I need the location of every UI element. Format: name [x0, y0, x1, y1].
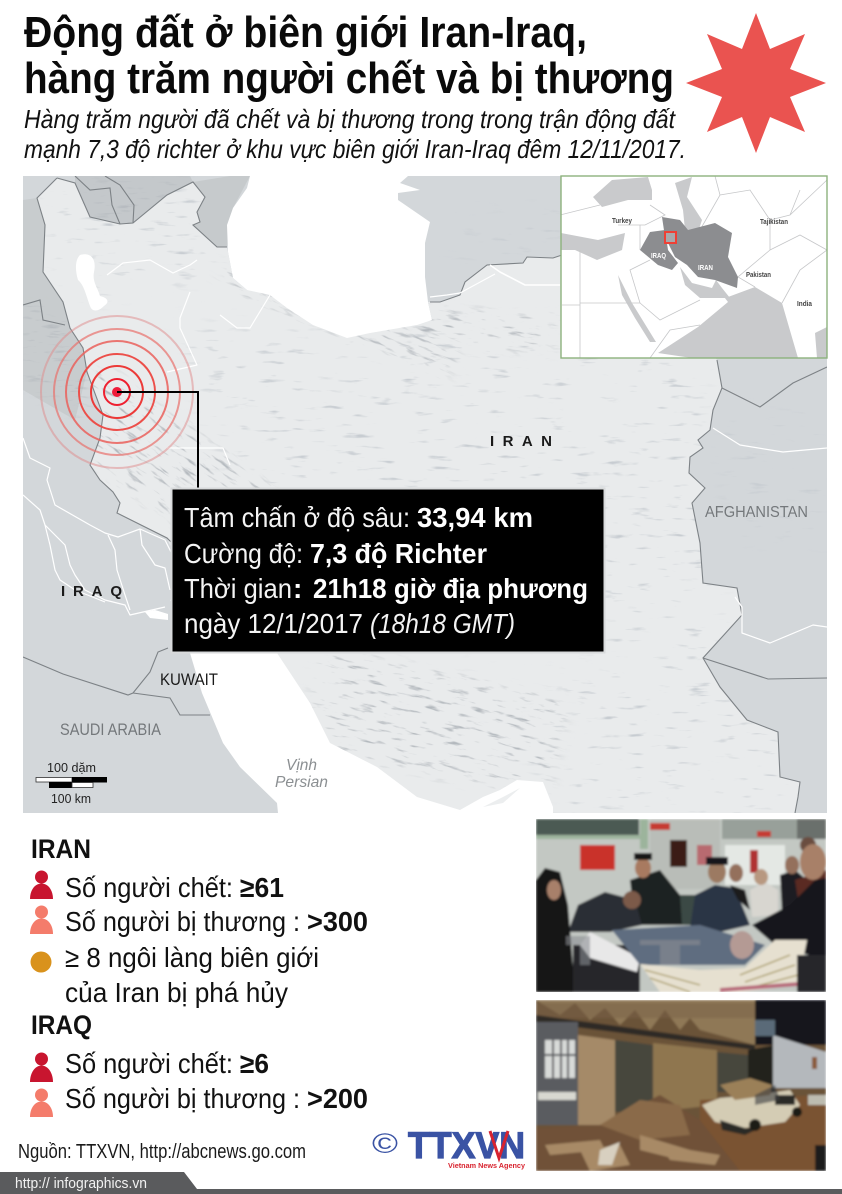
- map label: Persian Gulf: Persian: [275, 774, 328, 791]
- map panel: [23, 176, 830, 813]
- callout: earthquake facts: Thời gian: [184, 573, 292, 604]
- lake urmia: [76, 254, 107, 310]
- inset labels: Tajikistan: [760, 219, 788, 226]
- iran land mass: [23, 176, 827, 813]
- callout: earthquake facts: Cường độ:: [184, 538, 303, 569]
- icon: person red: [30, 870, 53, 899]
- logo: TTXVN: TTXVN: [408, 1125, 525, 1166]
- stat: deaths: ≥61: [240, 872, 284, 903]
- inset labels: Pakistan: [746, 272, 771, 279]
- photo: injured man on stretcher: [536, 819, 826, 992]
- inset labels: IRAQ: [651, 253, 666, 260]
- callout: earthquake facts: [172, 488, 604, 652]
- callout: earthquake facts: 33,94 km: [417, 502, 533, 533]
- icon: orange dot: [30, 952, 52, 972]
- stat: injured: Số người bị thương :: [65, 906, 300, 937]
- callout: earthquake facts: 7,3 độ Richter: [310, 538, 487, 569]
- logo: TTXVN: Vietnam News Agency: [448, 1161, 526, 1170]
- map label: Persian Gulf: [276, 758, 328, 787]
- stat: injured: >200: [307, 1083, 368, 1114]
- inset labels: [612, 218, 812, 308]
- map label: Afghanistan: AFGHANISTAN: [705, 504, 808, 521]
- stat: deaths: Số người chết:: [65, 1048, 233, 1079]
- stat: villages destroyed: [65, 942, 319, 1008]
- footer band: http:// infographics.vn: [15, 1175, 147, 1192]
- icon: copyright: ©: [372, 1128, 398, 1159]
- stat: deaths: ≥6: [240, 1048, 269, 1079]
- inset labels: IRAN: [698, 265, 713, 272]
- map label: Persian Gulf: Vịnh: [286, 757, 317, 774]
- stats panel: Iran: [30, 834, 368, 1008]
- callout: earthquake facts: :: [293, 573, 302, 604]
- stat: deaths: Số người chết:: [65, 872, 233, 903]
- epicentre rings: [41, 316, 193, 468]
- callout: earthquake facts: Tâm chấn ở độ sâu:: [184, 502, 410, 533]
- scale bar: [36, 762, 107, 803]
- inset: red locator square: [665, 232, 676, 243]
- country borders: [23, 176, 827, 813]
- stat: injured: >300: [307, 906, 368, 937]
- heading: IRAQ: IRAQ: [31, 1010, 92, 1040]
- inset: Iraq shape: [640, 230, 678, 270]
- map label: IRAQ: IRAQ: [61, 583, 122, 600]
- stat: villages destroyed: ≥ 8 ngôi làng biên giới: [65, 942, 319, 973]
- icon: person red: [30, 1052, 53, 1082]
- callout: earthquake facts: (18h18 GMT): [370, 608, 515, 639]
- icon: person pink: [30, 1088, 53, 1117]
- inset locator map: [560, 176, 827, 358]
- callout: earthquake facts: 21h18 giờ địa phương: [313, 573, 588, 604]
- title: [24, 8, 674, 103]
- inset labels: Turkey: [612, 218, 632, 225]
- source note: Nguồn: TTXVN, http://abcnews.go.com: [18, 1141, 306, 1163]
- stat: villages destroyed: của Iran bị phá hủy: [65, 977, 288, 1008]
- inset labels: India: [797, 301, 812, 308]
- icon: person pink: [30, 906, 53, 934]
- map label: IRAN: IRAN: [490, 433, 552, 450]
- map label: Kuwait: KUWAIT: [160, 670, 218, 689]
- subtitle: [24, 104, 686, 164]
- scale bar: 100 km: [51, 791, 91, 806]
- scale bar: 100 dặm: [47, 760, 96, 775]
- subtitle: Hàng trăm người đã chết và bị thương trong trong trận động đất: [24, 104, 677, 134]
- photo: collapsed building and crushed car: [536, 1000, 826, 1171]
- map label: Saudi Arabia: SAUDI ARABIA: [60, 720, 162, 739]
- inset: Iran shape: [662, 217, 738, 288]
- footer band: [0, 1172, 842, 1194]
- subtitle: mạnh 7,3 độ richter ở khu vực biên giới Iran-Iraq đêm 12/11/2017.: [24, 134, 686, 164]
- leader line: [117, 392, 198, 490]
- stats panel: Iraq: [30, 1010, 368, 1117]
- rivers: [23, 260, 827, 643]
- callout: earthquake facts: ngày 12/1/2017: [184, 608, 363, 639]
- icon: red eight-point star: [686, 13, 826, 153]
- stat: injured: Số người bị thương :: [65, 1083, 300, 1114]
- title: Động đất ở biên giới Iran-Iraq,: [24, 8, 587, 57]
- heading: IRAN: IRAN: [31, 834, 91, 864]
- title: hàng trăm người chết và bị thương: [24, 54, 674, 103]
